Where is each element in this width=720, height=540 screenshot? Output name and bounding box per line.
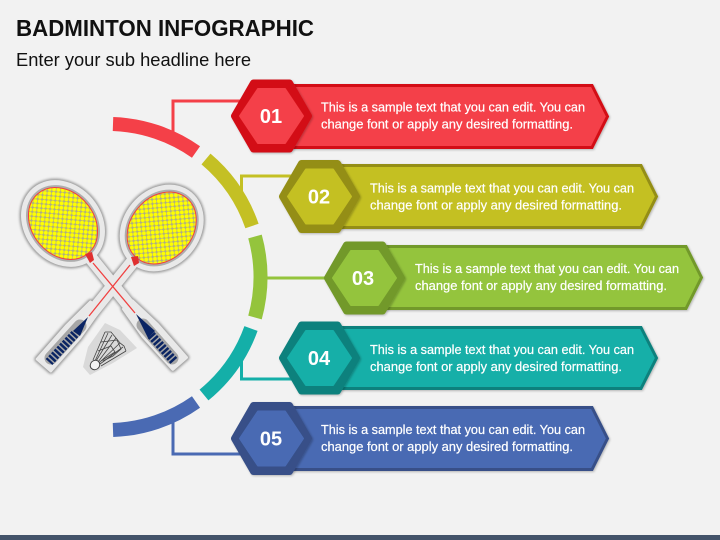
item 02 (282, 164, 656, 230)
banner 02 (334, 166, 656, 228)
arc segment 3 (255, 236, 260, 318)
subtitle: Enter your sub headline here (16, 49, 251, 70)
illustration: crossed badminton rackets and shuttlecock (2, 161, 223, 375)
banner 01 (285, 86, 608, 148)
text 02 (370, 182, 634, 212)
item 05 (234, 406, 608, 472)
text 05: This is a sample text that you can edit. You can (321, 423, 585, 437)
text 04: change font or apply any desired formatting. (370, 360, 622, 374)
arc segment 4 (204, 328, 251, 395)
footer bar (0, 535, 720, 540)
text 05 (321, 423, 585, 454)
arc segment 5 (113, 402, 196, 430)
item 01 (234, 83, 608, 149)
text 03: This is a sample text that you can edit. You can (415, 262, 679, 276)
text 03: change font or apply any desired formatting. (415, 279, 667, 293)
connector 01 (173, 101, 245, 132)
banner 03 (379, 246, 702, 308)
text 02: change font or apply any desired formatting. (370, 198, 622, 212)
text 04: This is a sample text that you can edit. You can (370, 343, 634, 357)
text 03 (415, 262, 679, 293)
sticker shadow outline (2, 161, 223, 371)
hexagon 03 (328, 245, 402, 311)
connector 04 (242, 360, 292, 379)
number 02: 02 (308, 186, 330, 208)
arc segment 1 (113, 124, 196, 152)
hexagon 02 (282, 164, 356, 230)
title: BADMINTON INFOGRAPHIC (16, 15, 314, 41)
right racket (49, 175, 214, 362)
text 04 (370, 343, 634, 374)
text 02: This is a sample text that you can edit. You can (370, 182, 634, 196)
text 01 (321, 100, 585, 132)
text 01: change font or apply any desired formatting. (321, 118, 573, 132)
number 04: 04 (308, 348, 331, 370)
hexagon 01 (234, 83, 308, 149)
banner 05 (285, 408, 608, 470)
hexagon 04 (282, 325, 356, 391)
text 05: change font or apply any desired formatting. (321, 440, 573, 454)
text 01: This is a sample text that you can edit. You can (321, 100, 585, 114)
connector 02 (242, 176, 292, 194)
item 04 (282, 325, 656, 391)
connector 05 (173, 422, 245, 454)
number 01: 01 (260, 106, 282, 128)
banner 04 (334, 328, 656, 388)
number 03: 03 (352, 268, 374, 290)
sticker body (4, 163, 221, 371)
connector 03 (266, 276, 332, 280)
arc segment 2 (206, 159, 252, 226)
shuttlecock (83, 323, 137, 375)
left racket (11, 170, 174, 361)
hexagon 05 (234, 406, 308, 472)
number 05: 05 (260, 428, 282, 450)
item 03 (328, 245, 702, 311)
